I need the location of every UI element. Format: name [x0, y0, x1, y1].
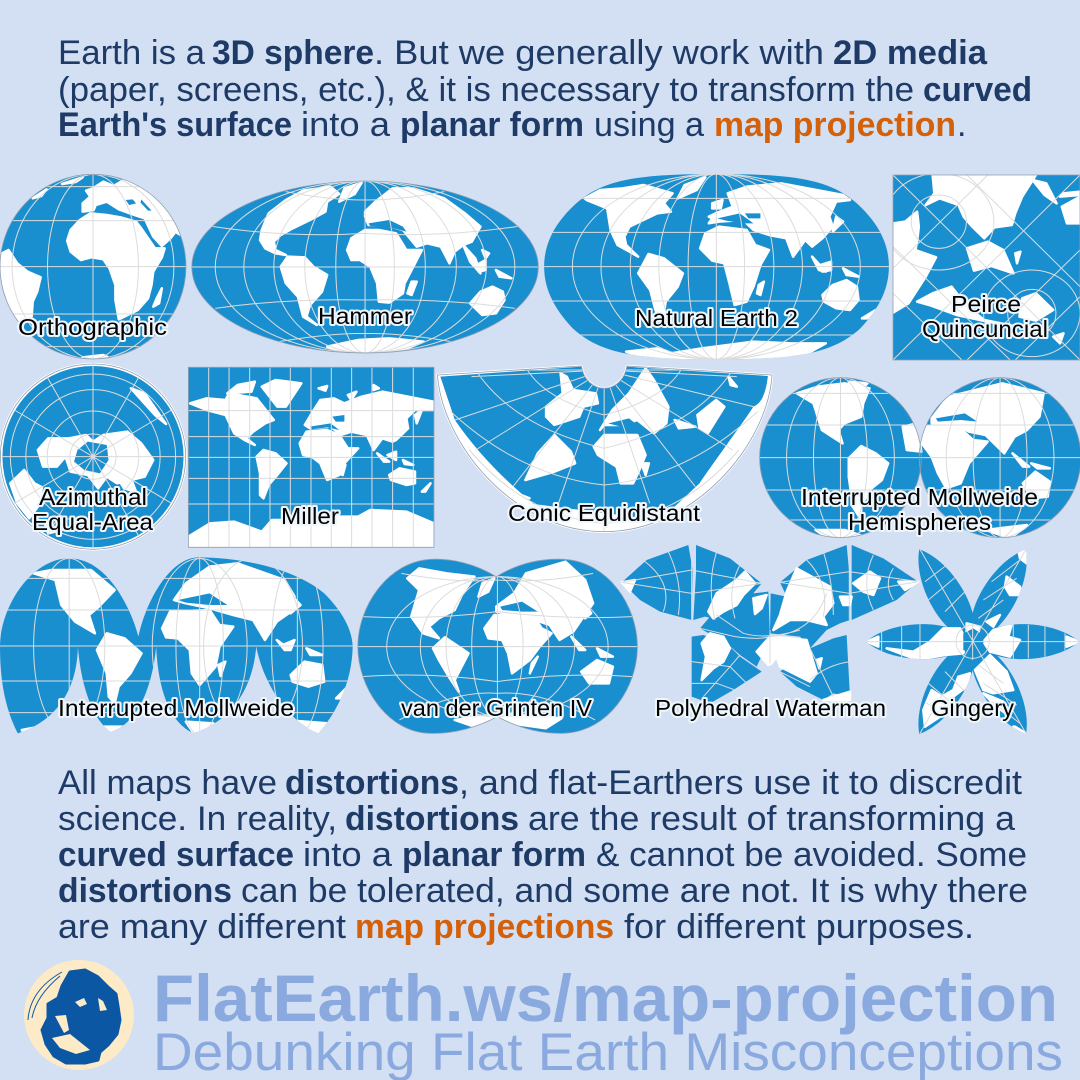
intro text block: . But we generally work with — [374, 34, 824, 72]
map: Interrupted Mollweide — [0, 550, 356, 737]
explanatory text block: for different purposes. — [624, 908, 974, 946]
label: Azimuthal Equal-Area: Azimuthal — [39, 484, 147, 510]
explanatory text block: are many different — [58, 908, 347, 946]
explanatory text block: map projections — [355, 908, 614, 946]
map: van der Grinten IV — [358, 557, 637, 737]
explanatory text block: distortions — [285, 764, 459, 802]
explanatory text block: distortions — [345, 800, 519, 838]
label: Gingery: Gingery — [931, 695, 1015, 721]
label: Hammer: Hammer — [318, 303, 412, 329]
intro text block: (paper, screens, etc.), & it is necessary to transform the — [58, 71, 914, 109]
label: Natural Earth 2: Natural Earth 2 — [635, 305, 798, 331]
label: Interrupted Mollweide Hemispheres: Interrupted Mollweide — [801, 484, 1038, 510]
explanatory text block: & cannot be avoided. Some — [596, 836, 1027, 874]
intro text block: . — [957, 106, 966, 144]
label: Miller: Miller — [281, 503, 339, 529]
map: Polyhedral Waterman — [622, 545, 918, 721]
explanatory text block: can be tolerated, and some are not. It is why there — [241, 872, 1028, 910]
intro text block: using a — [594, 106, 704, 144]
map: Interrupted Mollweide Hemispheres — [758, 377, 1080, 538]
intro text block: 3D sphere — [212, 34, 374, 72]
label: Peirce Quincuncial: Quincuncial — [922, 316, 1048, 342]
intro text block: 2D media — [833, 34, 988, 72]
label: Interrupted Mollweide Hemispheres: Hemispheres — [848, 509, 991, 535]
explanatory text block: distortions — [58, 872, 232, 910]
explanatory text block: curved surface — [58, 836, 294, 874]
label: Conic Equidistant: Conic Equidistant — [508, 500, 701, 526]
intro text block: planar form — [400, 106, 584, 144]
label: Interrupted Mollweide: Interrupted Mollweide — [58, 695, 294, 721]
map: Orthographic — [0, 170, 186, 363]
footer: site URL: FlatEarth.ws/map-projection — [153, 961, 1058, 1035]
intro text block: into a — [301, 106, 390, 144]
logo: flat earth disc — [24, 960, 134, 1070]
label: Azimuthal Equal-Area: Equal-Area — [32, 509, 153, 535]
map: Azimuthal Equal-Area — [0, 360, 186, 553]
label: Peirce Quincuncial: Peirce — [951, 291, 1021, 317]
map: Hammer — [192, 180, 539, 354]
explanatory text block: planar form — [402, 836, 586, 874]
intro text block: map projection — [714, 106, 956, 144]
map: Conic Equidistant — [437, 366, 772, 532]
intro text block: Earth is a — [58, 34, 205, 72]
map: Peirce Quincuncial — [884, 173, 1080, 360]
explanatory text block: All maps have — [58, 764, 277, 802]
map: Natural Earth 2 — [540, 170, 895, 360]
intro text block: curved — [923, 71, 1032, 109]
explanatory text block: science. In reality, — [58, 800, 337, 838]
intro text block: Earth's surface — [58, 106, 292, 144]
explanatory text block: into a — [303, 836, 392, 874]
label: Polyhedral Waterman: Polyhedral Waterman — [655, 695, 886, 721]
label: Orthographic: Orthographic — [18, 314, 167, 340]
map: Gingery — [863, 545, 1080, 737]
map: Miller — [188, 367, 434, 547]
explanatory text block: , and flat-Earthers use it to discredit — [459, 764, 1023, 802]
explanatory text block: are the result of transforming a — [528, 800, 1015, 838]
label: van der Grinten IV: van der Grinten IV — [401, 695, 593, 721]
